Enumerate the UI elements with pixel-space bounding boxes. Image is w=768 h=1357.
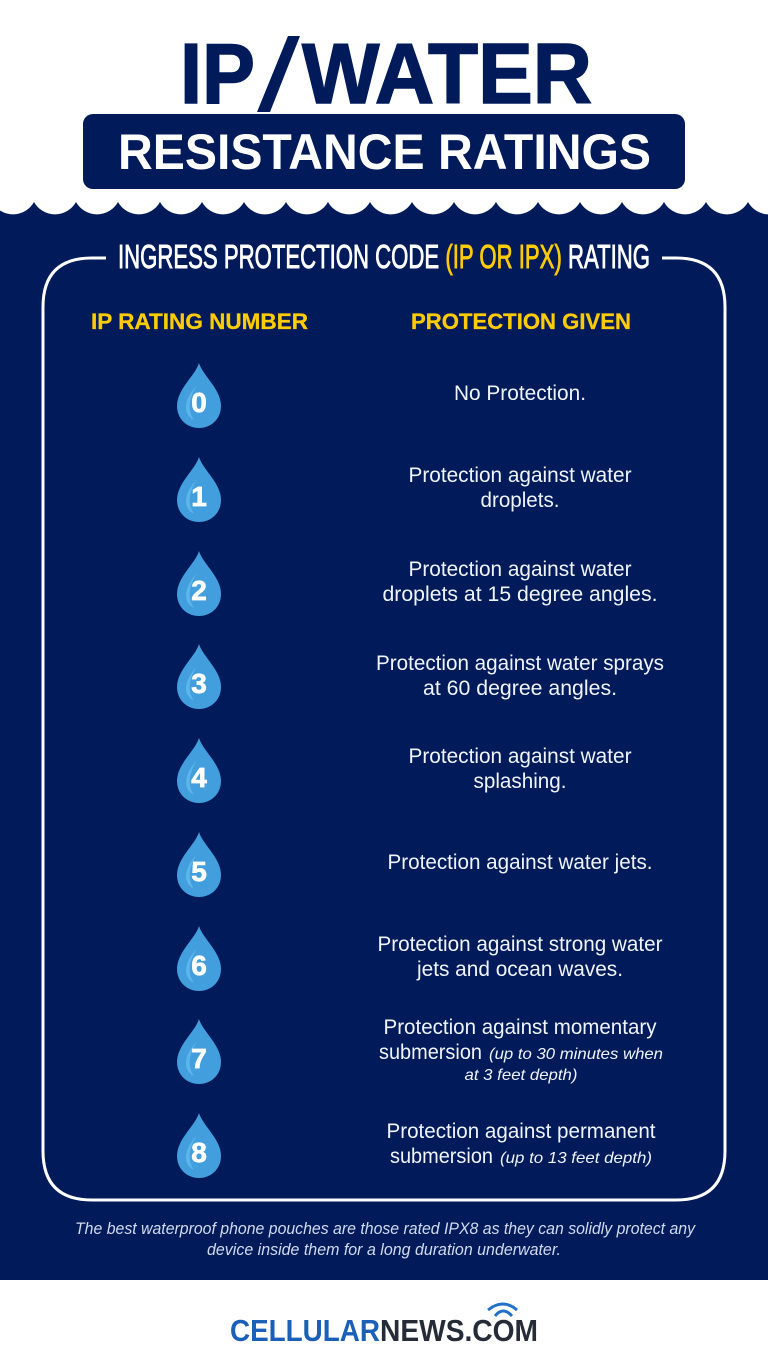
rating 3 text <box>376 652 664 700</box>
rating 8 text: submersion <box>390 1145 493 1168</box>
rating 4 drop: 4 <box>191 762 207 793</box>
rating 8 text: Protection against permanent <box>386 1120 656 1143</box>
rating 2 text: Protection against water <box>408 558 632 581</box>
rating 1 text: Protection against water <box>408 464 632 487</box>
icon: wifi signal <box>488 1304 517 1316</box>
rating 7 text: at 3 feet depth) <box>464 1067 578 1084</box>
logo: cellularnews.com: NEWS.COM <box>380 1313 538 1348</box>
rating 6 drop <box>177 926 221 991</box>
rating 6 text: Protection against strong water <box>378 933 662 956</box>
rating 6 drop: 6 <box>191 950 207 981</box>
logo: cellularnews.com <box>230 1304 538 1348</box>
rating 7 text: submersion <box>379 1041 482 1064</box>
rating 8 text <box>386 1120 656 1168</box>
rating 1 text: droplets. <box>480 489 560 512</box>
title: IP/WATER <box>180 27 592 122</box>
rating 7 drop: 7 <box>191 1043 207 1074</box>
rating 0 text: No Protection. <box>454 382 586 405</box>
rating 2 text: droplets at 15 degree angles. <box>382 583 658 606</box>
rating 3 text: at 60 degree angles. <box>423 677 617 700</box>
rating 8 text: (up to 13 feet depth) <box>500 1150 652 1167</box>
rating 1 drop <box>177 457 221 522</box>
rating 4 text: Protection against water <box>408 745 632 768</box>
rating 6 text <box>378 933 662 981</box>
title: IP/WATER: WATER <box>302 27 592 122</box>
rounded frame <box>43 258 725 1200</box>
column heading: protection given: PROTECTION GIVEN <box>411 309 631 334</box>
rating 3 drop: 3 <box>191 668 207 699</box>
rating 1 text <box>408 464 632 512</box>
rating 2 text <box>382 558 658 606</box>
rating 7 text: (up to 30 minutes when <box>489 1046 663 1063</box>
rating 5 drop: 5 <box>191 856 207 887</box>
column heading: IP rating number: IP RATING NUMBER <box>91 309 308 334</box>
rating 0 drop <box>177 363 221 428</box>
rating 1 drop: 1 <box>191 481 207 512</box>
banner: resistance ratings <box>83 114 685 189</box>
logo: cellularnews.com: CELLULAR <box>230 1313 380 1348</box>
rating 4 drop <box>177 738 221 803</box>
rating 3 drop <box>177 644 221 709</box>
rating 7 text <box>379 1016 663 1084</box>
navy panel with scalloped wave edge <box>0 202 768 1280</box>
footnote: The best waterproof phone pouches are those rated IPX8 as they can solidly protect any <box>75 1219 696 1238</box>
rating 4 text: splashing. <box>474 770 566 793</box>
rating 8 drop <box>177 1113 221 1178</box>
rating 0 drop: 0 <box>191 387 207 418</box>
rating 8 drop: 8 <box>191 1137 207 1168</box>
rating 2 drop <box>177 551 221 616</box>
footnote: device inside them for a long duration underwater. <box>207 1240 561 1259</box>
rating 5 drop <box>177 832 221 897</box>
rating 5 text: Protection against water jets. <box>388 851 652 874</box>
rating 7 text: Protection against momentary <box>384 1016 657 1039</box>
title: IP/WATER: IP <box>180 27 255 122</box>
banner: resistance ratings: RESISTANCE RATINGS <box>118 124 651 180</box>
rating 4 text <box>408 745 632 793</box>
heading: ingress protection code: INGRESS PROTECTION CODE (IP OR IPX) RATING <box>118 238 650 275</box>
rating 2 drop: 2 <box>191 575 207 606</box>
footnote <box>75 1219 696 1259</box>
rating 7 drop <box>177 1019 221 1084</box>
rating 3 text: Protection against water sprays <box>376 652 664 675</box>
rating 6 text: jets and ocean waves. <box>416 958 623 981</box>
